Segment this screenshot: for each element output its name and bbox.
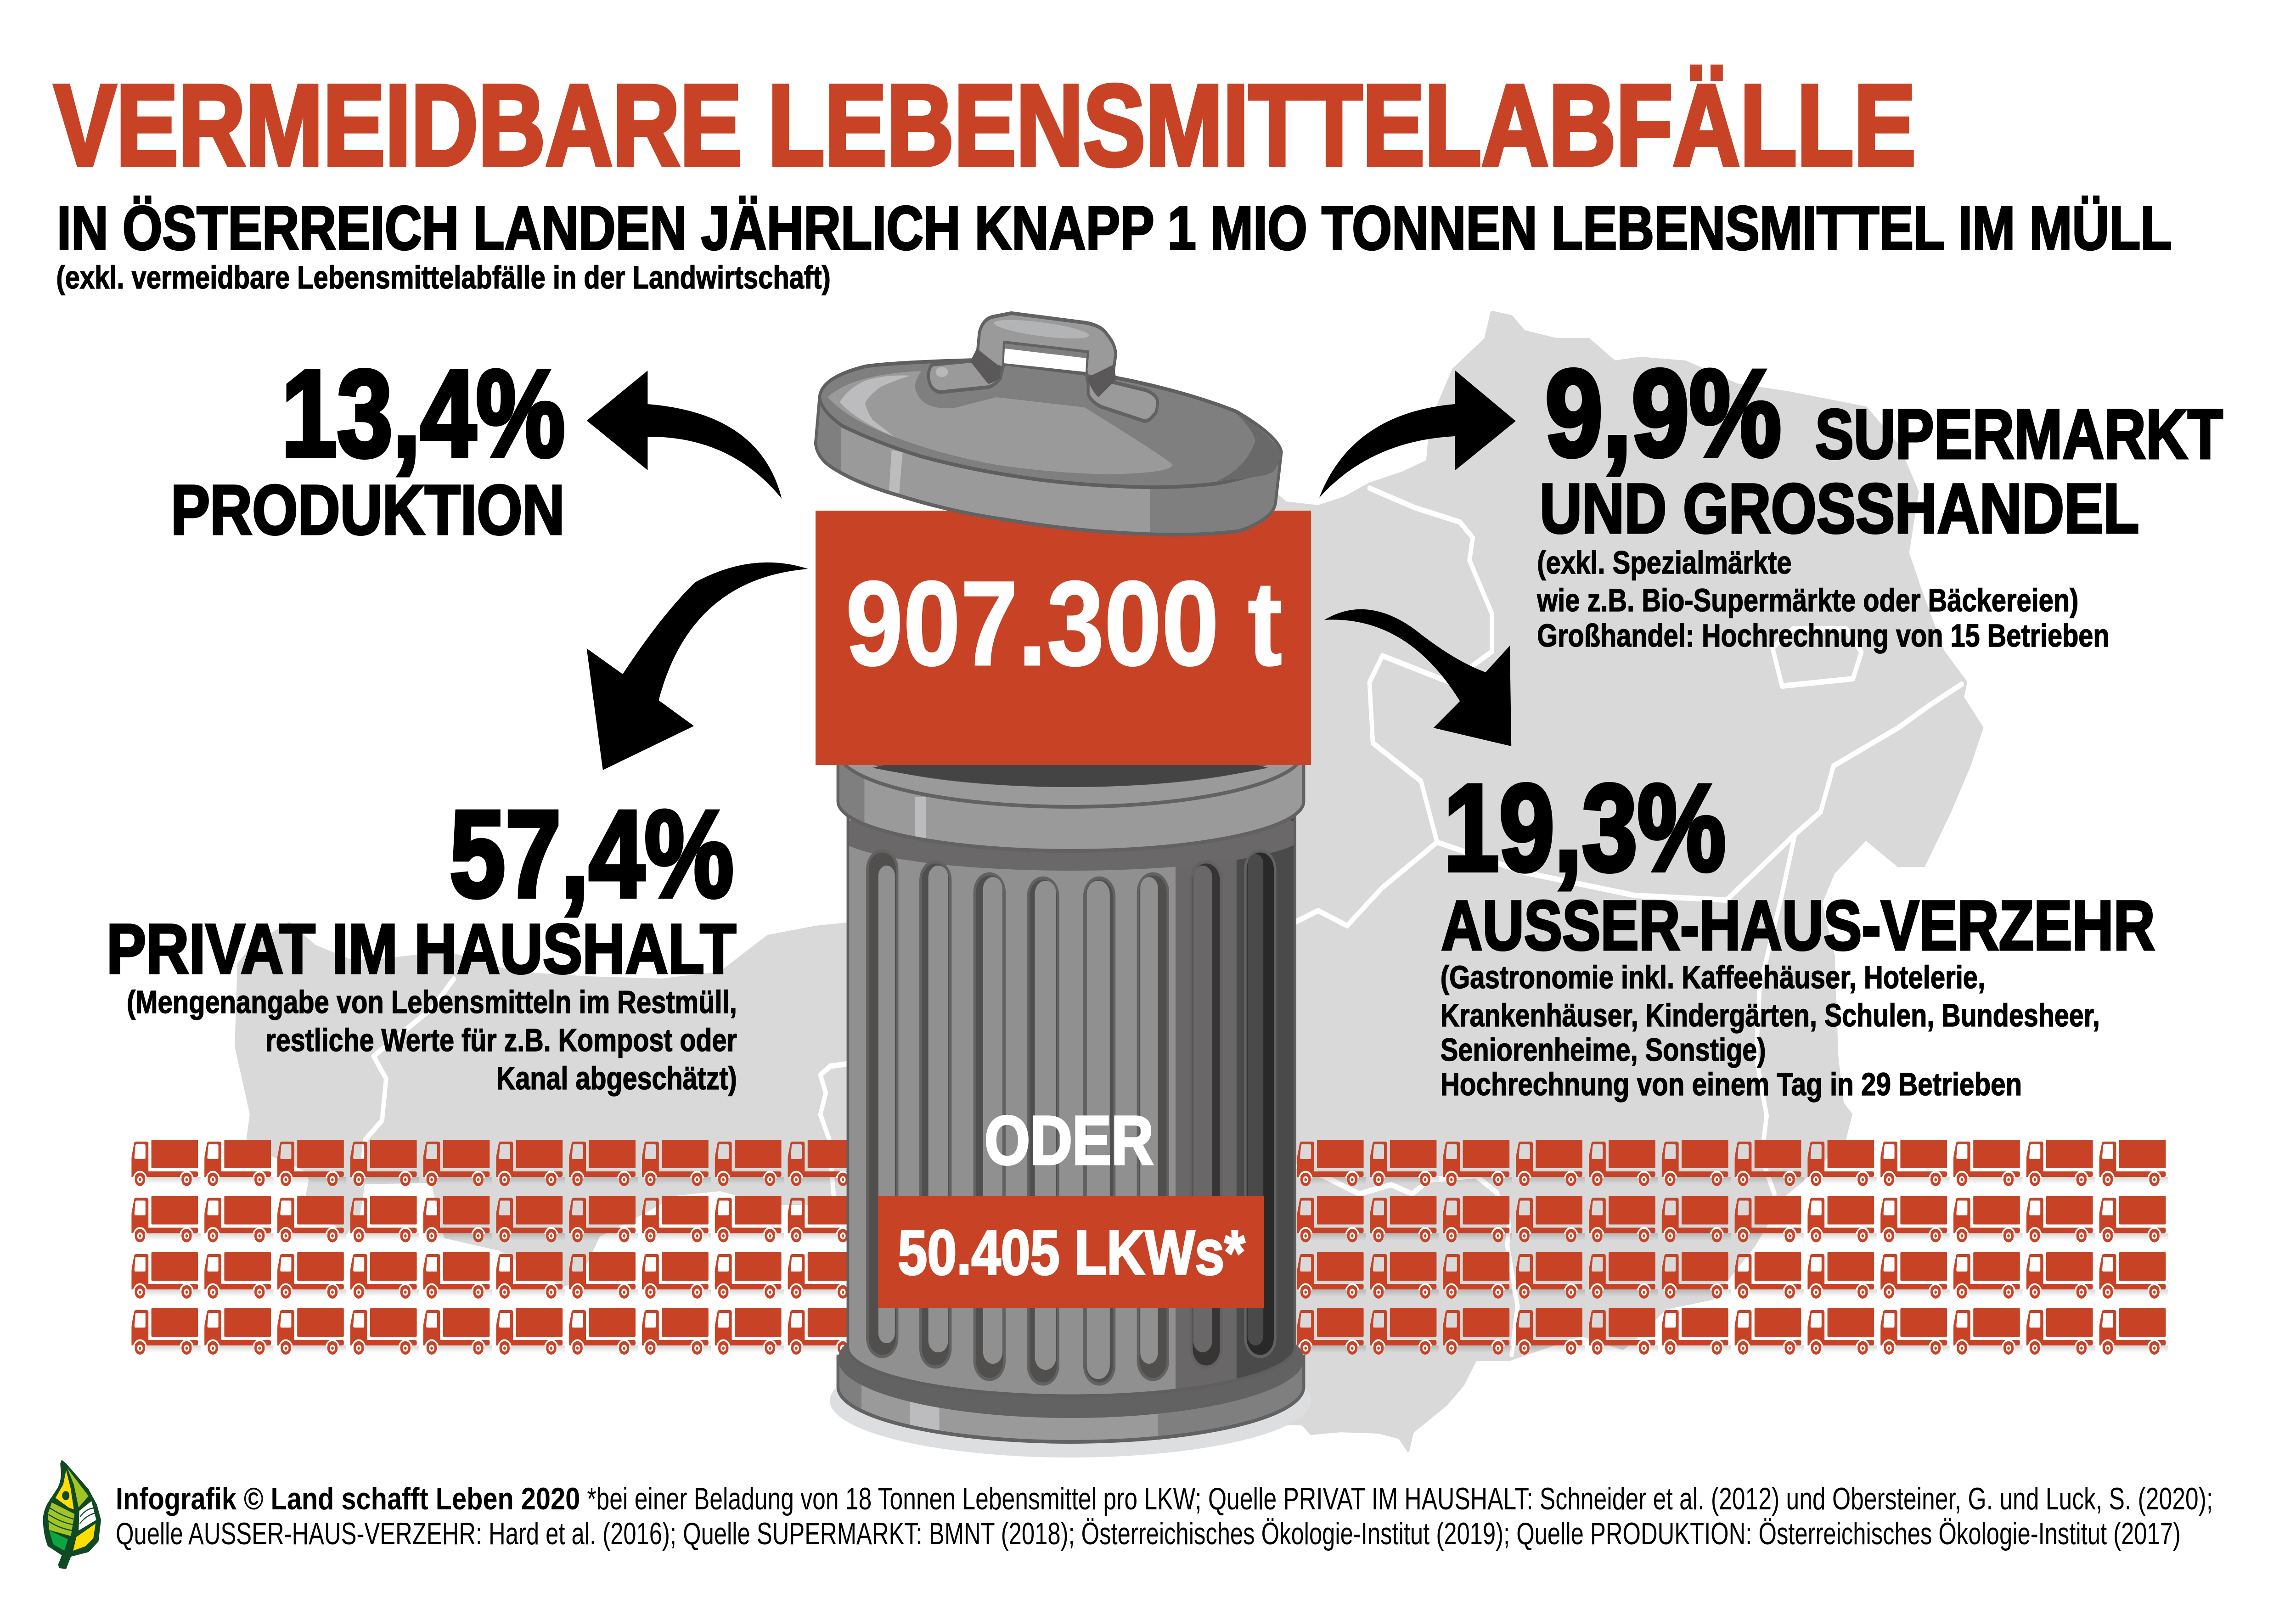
truck count box bbox=[878, 1196, 1264, 1308]
note: Hochrechnung von einem Tag in 29 Betrieben bbox=[1441, 1067, 2022, 1102]
note bbox=[127, 985, 737, 1096]
label: AUSSER-HAUS-VERZEHR bbox=[1441, 887, 2155, 965]
truck grid bbox=[131, 1140, 2168, 1355]
note: (Mengenangabe von Lebensmitteln im Restmüll, bbox=[127, 985, 737, 1020]
stat: privat im haushalt bbox=[107, 785, 737, 1096]
can body bbox=[836, 796, 1306, 1405]
total amount: 907.300 t bbox=[846, 557, 1282, 691]
oder label: ODER bbox=[985, 1102, 1154, 1179]
lid top bbox=[820, 360, 1282, 487]
note: restliche Werte für z.B. Kompost oder bbox=[265, 1023, 737, 1058]
icon: land schafft leben leaf logo bbox=[43, 1460, 101, 1569]
percentage: 57,4% bbox=[450, 785, 734, 923]
grooves bbox=[867, 851, 1275, 1384]
note: Großhandel: Hochrechnung von 15 Betrieben bbox=[1537, 618, 2110, 653]
lid rim bbox=[814, 395, 1286, 542]
arrow: to ausser-haus-verzehr bbox=[1324, 609, 1511, 746]
percentage: 19,3% bbox=[1444, 759, 1726, 896]
stat: produktion bbox=[171, 345, 565, 549]
percentage: 9,9% bbox=[1545, 344, 1781, 482]
label line one: SUPERMARKT bbox=[1815, 395, 2223, 473]
stat: ausser-haus-verzehr bbox=[1441, 759, 2155, 1102]
sources line one: *bei einer Beladung von 18 Tonnen Lebensmittel pro LKW; Quelle PRIVAT IM HAUSHALT: Schneider et al. (2012) und Obersteiner, G. und Luck, S. (2020); bbox=[587, 1481, 2213, 1516]
trash can bbox=[830, 765, 1305, 1457]
alternative comparison on can bbox=[878, 1102, 1264, 1308]
note: Kanal abgeschätzt) bbox=[496, 1061, 737, 1096]
map of Austria background bbox=[236, 313, 1982, 1450]
trash can lid bbox=[814, 313, 1286, 542]
note: (Gastronomie inkl. Kaffeehäuser, Hotelerie, bbox=[1441, 960, 1985, 995]
arrow: to privat im haushalt bbox=[587, 563, 808, 770]
title: VERMEIDBARE LEBENSMITTELABFÄLLE bbox=[54, 61, 1916, 190]
credit: Infografik © Land schafft Leben 2020 bbox=[116, 1481, 580, 1516]
truck count box: 50.405 LKWs* bbox=[898, 1217, 1245, 1288]
can shadow bbox=[830, 1344, 1311, 1457]
note bbox=[1536, 545, 2110, 653]
note: Seniorenheime, Sonstige) bbox=[1441, 1032, 1766, 1068]
subtitle: IN ÖSTERREICH LANDEN JÄHRLICH KNAPP 1 MIO TONNEN LEBENSMITTEL IM MÜLL bbox=[57, 193, 2172, 263]
label: PRIVAT IM HAUSHALT bbox=[107, 910, 736, 988]
can base bbox=[837, 1344, 1305, 1444]
footer sources bbox=[116, 1481, 2213, 1551]
lid handle bbox=[929, 313, 1158, 421]
arrow: to supermarkt bbox=[1319, 370, 1516, 498]
sources line two: Quelle AUSSER-HAUS-VERZEHR: Hard et al. (2016); Quelle SUPERMARKT: BMNT (2018); Österreichisches Ökologie-Institut (2019); Quelle PRODUKTION: Österreichisches Ökologie-Institut (2017) bbox=[116, 1516, 2181, 1551]
subtitle note: (exkl. vermeidbare Lebensmittelabfälle in der Landwirtschaft) bbox=[56, 260, 831, 295]
label line two: UND GROSSHANDEL bbox=[1540, 470, 2139, 548]
total amount box bbox=[816, 511, 1311, 765]
percentage: 13,4% bbox=[281, 345, 565, 482]
label: PRODUKTION bbox=[171, 471, 565, 549]
note: Krankenhäuser, Kindergärten, Schulen, Bundesheer, bbox=[1441, 998, 2100, 1033]
can rim bbox=[837, 765, 1305, 849]
note: wie z.B. Bio-Supermärkte oder Bäckereien) bbox=[1536, 583, 2078, 618]
note bbox=[1441, 960, 2100, 1102]
arrow: to produktion bbox=[587, 371, 782, 499]
stat: supermarkt und grosshandel bbox=[1536, 344, 2223, 653]
note: (exkl. Spezialmärkte bbox=[1537, 545, 1792, 580]
